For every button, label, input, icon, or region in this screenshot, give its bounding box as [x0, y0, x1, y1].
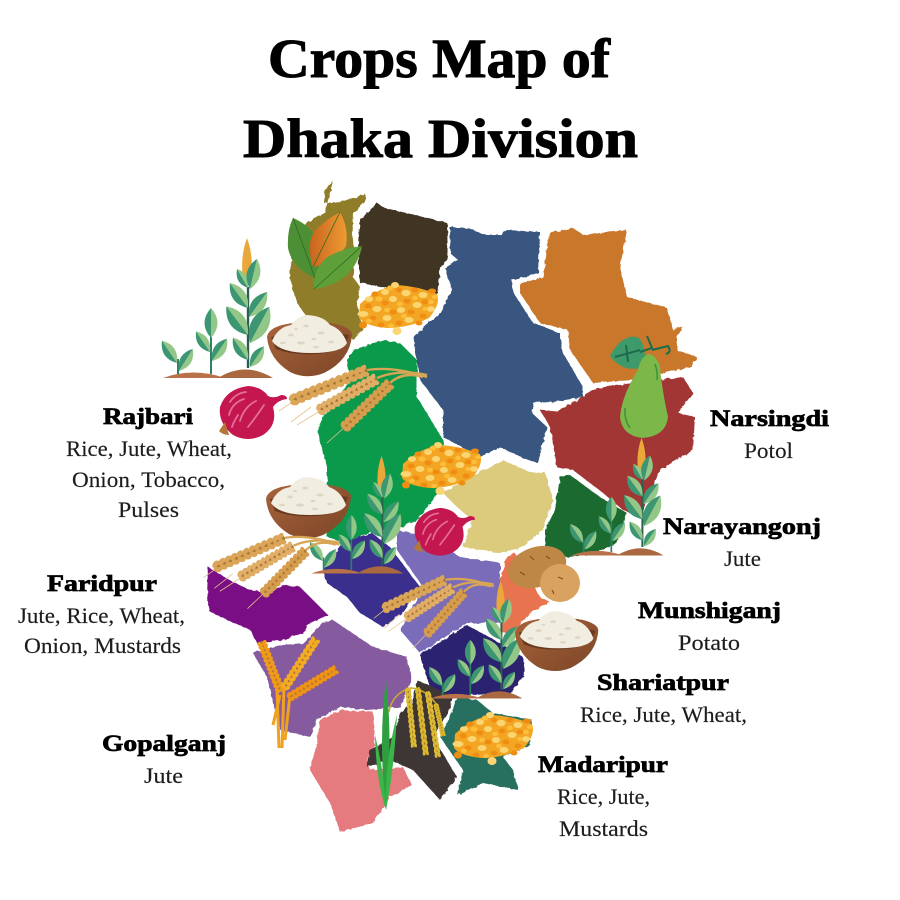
district: orange — [520, 228, 697, 383]
district: violet — [253, 620, 412, 737]
label: Faridpur: Onion, Mustards — [24, 633, 181, 658]
icon: lentils centre — [400, 442, 481, 495]
district: magenta — [207, 567, 328, 643]
label: Faridpur: Faridpur — [47, 571, 157, 596]
district: indigo — [323, 533, 420, 627]
label: Madaripur — [538, 752, 668, 841]
district: navy — [420, 625, 525, 697]
label: Munshiganj: Munshiganj — [638, 598, 781, 623]
label: Faridpur: Jute, Rice, Wheat, — [18, 603, 185, 628]
label: Rajbari: Pulses — [118, 497, 179, 522]
label: Rajbari: Rice, Jute, Wheat, — [66, 436, 232, 461]
label: Rajbari: Rajbari — [103, 404, 194, 429]
district: teal — [440, 697, 532, 795]
icon: tobacco leaves — [288, 212, 362, 289]
district: khaki — [443, 460, 553, 553]
label: Narayangonj: Narayangonj — [663, 514, 821, 539]
district: blue — [413, 227, 583, 463]
icon: plant centre — [306, 456, 407, 573]
district: olive — [290, 181, 367, 340]
district: dark brown north — [358, 203, 448, 293]
district: coral — [500, 553, 550, 633]
title: Crops Map of — [268, 28, 611, 89]
label: Rajbari — [66, 404, 232, 522]
district: dark brown south — [367, 680, 457, 800]
label: Narsingdi — [710, 406, 830, 463]
district: red — [540, 377, 695, 517]
icon: wheat south — [374, 573, 494, 648]
map of Dhaka Division districts — [207, 181, 697, 832]
district: lavender — [397, 530, 500, 653]
icon: rice bowl north — [267, 315, 352, 376]
label: Narayangonj: Jute — [724, 546, 761, 571]
icon: lentils south — [452, 712, 533, 765]
label: Gopalganj — [102, 731, 226, 788]
icon: rice bowl south — [515, 611, 598, 671]
icon: plant east — [566, 438, 667, 555]
district: pink — [310, 710, 412, 832]
label: Munshiganj: Potato — [678, 630, 740, 655]
icon: wheat north — [279, 363, 427, 443]
title — [243, 28, 638, 169]
icon: rice plant — [375, 680, 447, 810]
icon: lentils north — [358, 282, 438, 335]
icon: plant south — [425, 581, 526, 698]
label: Shariatpur — [580, 670, 747, 727]
icon: golden wheat — [255, 635, 341, 748]
label: Narsingdi: Narsingdi — [710, 406, 830, 431]
label: Madaripur: Mustards — [559, 816, 648, 841]
label: Gopalganj: Gopalganj — [102, 731, 226, 756]
label: Munshiganj — [638, 598, 781, 655]
district: bright green — [317, 340, 447, 543]
district: dark green — [545, 475, 627, 557]
icon: onion centre — [414, 508, 475, 556]
icon: pointed gourd — [610, 336, 670, 438]
title: Dhaka Division — [243, 108, 638, 169]
icon: potatoes — [502, 539, 580, 602]
icon: rice bowl west — [266, 477, 351, 538]
icon: plant left — [157, 238, 277, 378]
label: Faridpur — [18, 571, 185, 658]
label: Gopalganj: Jute — [144, 763, 183, 788]
icon: wheat west — [203, 531, 339, 609]
label: Narsingdi: Potol — [744, 438, 793, 463]
label: Rajbari: Onion, Tobacco, — [72, 467, 225, 492]
icon: onion north — [219, 386, 287, 439]
label: Shariatpur: Rice, Jute, Wheat, — [580, 702, 747, 727]
label: Shariatpur: Shariatpur — [597, 670, 729, 695]
label: Madaripur: Madaripur — [538, 752, 668, 777]
label: Madaripur: Rice, Jute, — [557, 784, 650, 809]
label: Narayangonj — [663, 514, 821, 571]
